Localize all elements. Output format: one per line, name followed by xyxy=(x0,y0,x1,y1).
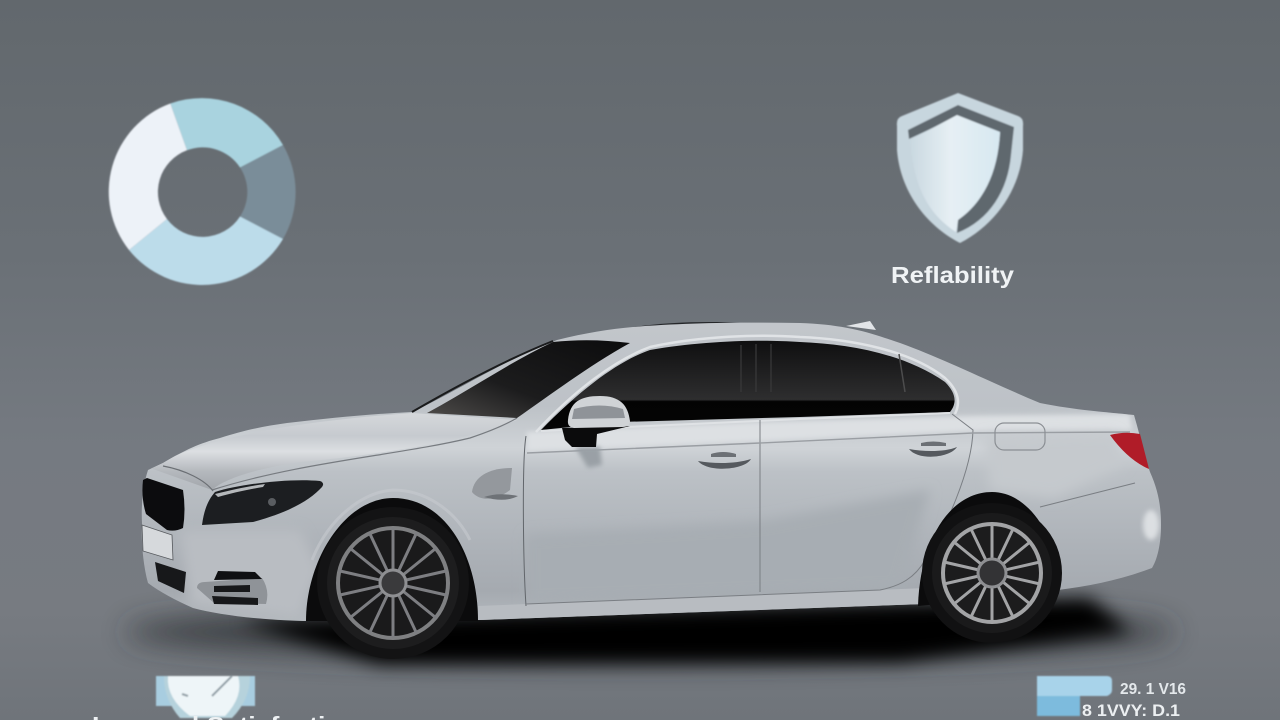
door line: centre xyxy=(759,420,761,592)
mirror cap xyxy=(568,396,630,428)
mirror xyxy=(562,396,630,468)
mirror shadow on door xyxy=(575,447,602,468)
shield inner face xyxy=(910,115,1000,232)
rear quarter highlight xyxy=(992,443,1113,496)
tyre xyxy=(317,507,469,659)
lower bar xyxy=(1037,696,1080,716)
bottom-right text: line one: 29. 1 V16 xyxy=(1120,681,1186,698)
character line xyxy=(527,432,1130,453)
hub xyxy=(978,559,1006,587)
badge shield xyxy=(164,676,250,718)
spokes xyxy=(340,529,446,637)
arch lip highlight xyxy=(312,490,470,560)
hood surface xyxy=(150,413,517,490)
icon: bottom-left badge xyxy=(156,676,255,718)
label: Reflability: Reflability xyxy=(891,262,1014,288)
front wheel xyxy=(317,507,469,659)
beltline highlight xyxy=(527,414,1132,451)
door lower reflection xyxy=(670,492,926,536)
side windows xyxy=(541,341,955,430)
door line: front edge xyxy=(523,436,526,606)
sill xyxy=(478,588,925,622)
upper bar xyxy=(1037,676,1112,696)
front fender shading xyxy=(180,530,320,618)
hub xyxy=(380,570,406,596)
car body xyxy=(142,323,1161,621)
tyre xyxy=(922,503,1062,643)
body shading xyxy=(150,413,1159,622)
rear spoiler tip xyxy=(846,321,876,330)
windshield dark edge xyxy=(412,341,553,412)
segment: top xyxy=(170,98,283,168)
mirror cap shade xyxy=(572,406,625,419)
window pillar xyxy=(741,344,771,392)
badge xyxy=(484,494,518,500)
number plate xyxy=(142,525,173,560)
ground shadow xyxy=(125,598,1175,664)
segment: right xyxy=(240,145,296,239)
rim xyxy=(943,524,1041,622)
windshield xyxy=(427,340,630,418)
badge check mark xyxy=(182,676,232,696)
icon: bottom-right bars xyxy=(1037,676,1112,716)
grille xyxy=(142,478,184,531)
door handle: front xyxy=(698,452,751,469)
fuel door xyxy=(995,423,1045,450)
icon: shield xyxy=(897,93,1023,243)
bottom-right text: line two: 8 1VVY: D.1 xyxy=(1082,701,1180,720)
rear quarter window divider xyxy=(899,354,905,392)
badge backing xyxy=(156,676,255,706)
sunroof edge xyxy=(633,322,740,327)
beltline chrome xyxy=(541,413,950,431)
window trim xyxy=(536,336,958,432)
rear bumper highlight xyxy=(1143,510,1159,540)
door handle: rear xyxy=(909,442,957,457)
bonnet shut line xyxy=(163,466,213,491)
hood crease xyxy=(212,418,517,490)
badge highlight xyxy=(168,676,239,716)
wheel arch: rear xyxy=(918,492,1058,606)
fog light vent xyxy=(197,571,267,605)
donut chart xyxy=(109,98,296,285)
headlight xyxy=(202,480,323,525)
rear wheel xyxy=(922,503,1062,643)
mirror arm xyxy=(562,426,630,447)
rim xyxy=(338,528,448,638)
wheel arch: front xyxy=(306,498,478,621)
segment: bottom xyxy=(129,216,283,285)
rear lower crease xyxy=(1040,483,1135,507)
fender vent xyxy=(472,468,512,499)
door line: rear xyxy=(526,414,973,604)
car xyxy=(142,321,1161,659)
spokes xyxy=(944,524,1040,622)
shield dark band xyxy=(908,105,1014,233)
shield outer rim xyxy=(897,93,1023,243)
tail light xyxy=(1110,433,1149,469)
segment: left xyxy=(109,104,187,250)
lower intake xyxy=(155,562,186,593)
